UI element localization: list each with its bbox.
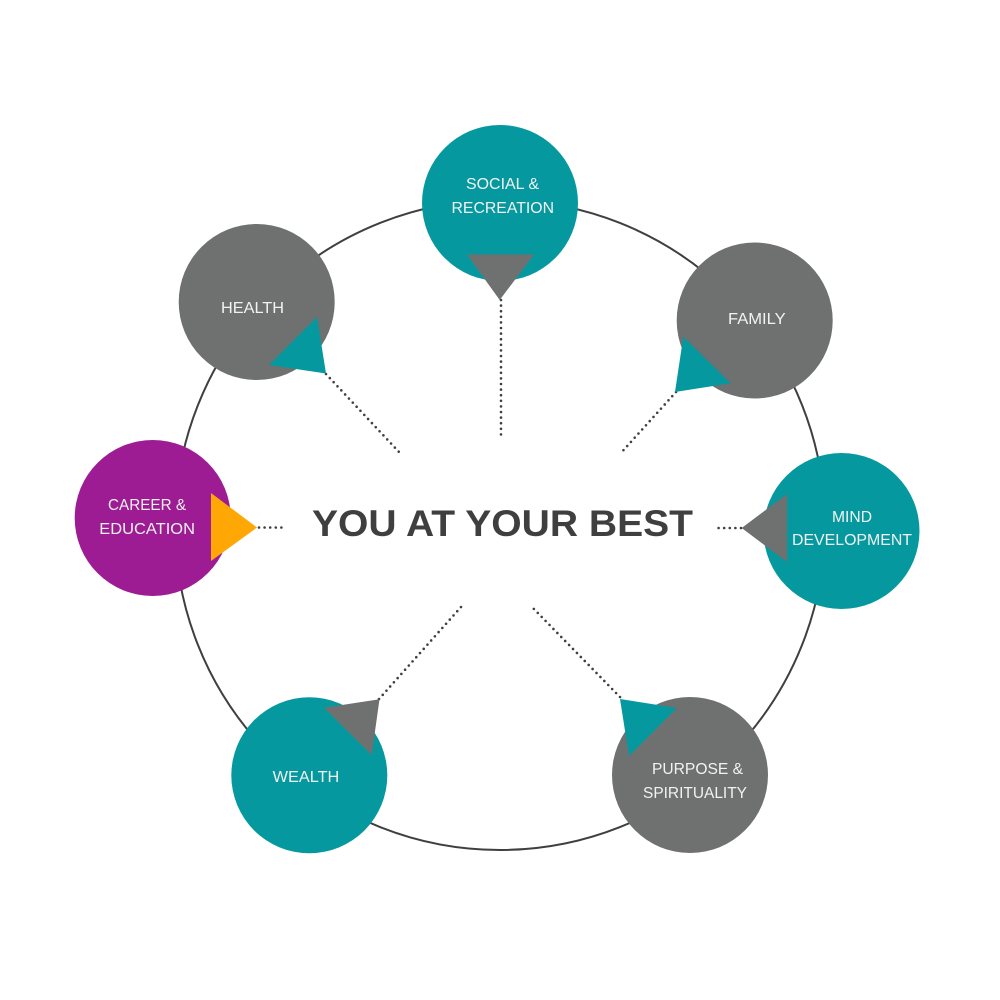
outer ring — [175, 200, 825, 850]
node: mind development — [742, 453, 920, 609]
node: family — [675, 242, 833, 398]
node: family: FAMILY — [728, 311, 786, 328]
node: wealth — [231, 697, 387, 853]
node: social and recreation — [422, 125, 578, 300]
node: health — [179, 224, 335, 380]
node: career and education: CAREER & — [108, 497, 186, 514]
node: health: HEALTH — [221, 300, 284, 317]
node: purpose and spirituality: SPIRITUALITY — [643, 785, 747, 802]
node: social and recreation: SOCIAL & — [466, 176, 539, 193]
node: social and recreation: RECREATION — [452, 200, 554, 217]
node: purpose and spirituality: PURPOSE & — [652, 761, 743, 778]
node: wealth: WEALTH — [273, 769, 339, 786]
dotted connectors — [259, 300, 741, 699]
node: purpose and spirituality — [612, 697, 768, 853]
node: mind development: MIND — [832, 509, 872, 526]
node: career and education: EDUCATION — [99, 521, 195, 538]
node: mind development: DEVELOPMENT — [792, 532, 912, 549]
node: career and education — [75, 440, 257, 596]
title: YOU AT YOUR BEST — [312, 502, 693, 544]
